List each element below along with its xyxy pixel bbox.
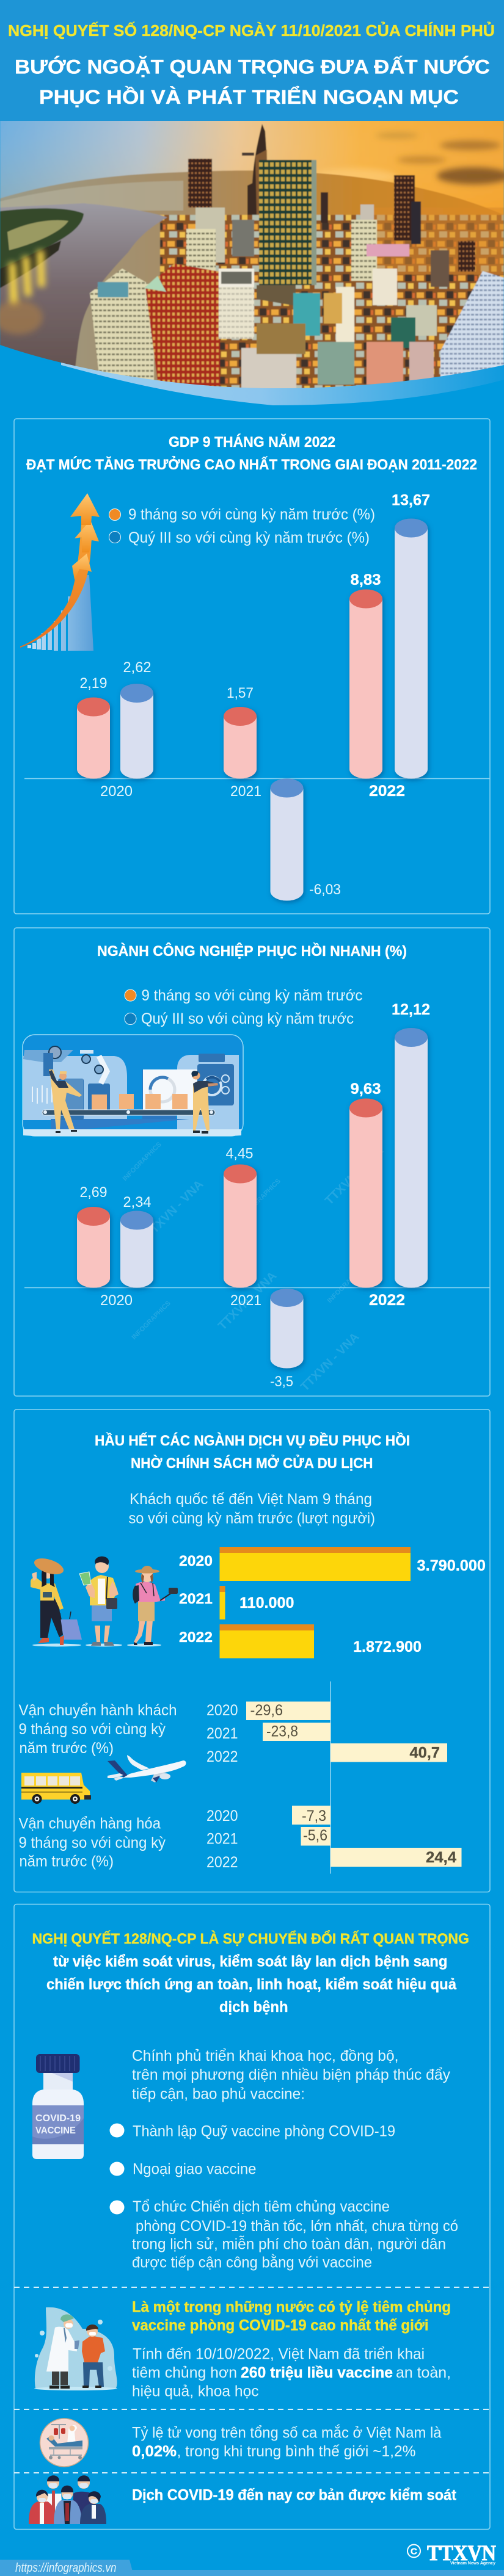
bar chart: cargo transport: -7,3: [302, 1807, 326, 1825]
bars 2022: [349, 492, 430, 800]
bullet 3: phòng COVID-19 thần tốc, lớn nhất, chưa từng có: [136, 2218, 458, 2235]
intro text: [132, 2047, 450, 2102]
watermarks: INFOGRAPHICS: [241, 1178, 282, 1219]
icon: patient in hospital bed: [40, 2419, 88, 2467]
bars 2021: 4,45: [226, 1145, 253, 1162]
legend: Quý III so với cùng kỳ năm trước: [141, 1010, 354, 1027]
legend: [125, 987, 363, 1027]
bar 2020: 2020: [179, 1553, 213, 1569]
source url: https://infographics.vn: [15, 2561, 116, 2575]
main title: [15, 56, 490, 108]
bar chart: GDP: [24, 492, 490, 900]
resolution heading: chiến lược thích ứng an toàn, linh hoạt, kiểm soát hiệu quả: [46, 1976, 457, 1993]
bar 2021: [179, 1586, 294, 1619]
main title: PHỤC HỒI VÀ PHÁT TRIỂN NGOẠN MỤC: [39, 86, 459, 108]
vaccination text: tiêm chủng hơn: [132, 2364, 237, 2381]
watermarks: [122, 1141, 386, 1394]
cargo transport label: [18, 1815, 166, 1870]
footer ribbon: [0, 2560, 504, 2576]
cargo transport label: năm trước (%): [20, 1853, 114, 1870]
logo: TTXVN: [407, 2541, 496, 2566]
panel: resolution and vaccine: [14, 1905, 490, 2530]
resolution heading: [32, 1930, 469, 2016]
bar 2021: 110.000: [239, 1594, 294, 1612]
mortality text: 0,02%: [132, 2443, 177, 2460]
bar chart: passenger transport: 2020: [206, 1702, 238, 1719]
bar chart: passenger transport: 2021: [206, 1725, 238, 1742]
bars 2021: 1,57: [227, 685, 254, 701]
bar chart: international visitors: [179, 1547, 486, 1658]
mortality text: , trong khi trung bình thế giới ~1,2%: [177, 2443, 415, 2460]
cargo transport label: 9 tháng so với cùng kỳ: [18, 1834, 166, 1851]
industry heading: NGÀNH CÔNG NGHIỆP PHỤC HỒI NHANH (%): [97, 942, 407, 960]
kicker title: NGHỊ QUYẾT SỐ 128/NQ-CP NGÀY 11/10/2021 CỦA CHÍNH PHỦ: [8, 21, 495, 40]
icon: vaccine bottle: VACCINE: [35, 2126, 76, 2136]
bullet 2: Ngoại giao vaccine: [133, 2161, 257, 2178]
GDP heading: ĐẠT MỨC TĂNG TRƯỞNG CAO NHẤT TRONG GIAI ĐOẠN 2011-2022: [26, 455, 477, 473]
bar chart: cargo transport: -5,6: [303, 1827, 327, 1844]
bar 2022: [179, 1624, 422, 1658]
bar chart: cargo transport: 2020: [206, 1807, 238, 1825]
bar chart: cargo transport: 24,4: [426, 1849, 456, 1866]
bars 2020: 2,69: [79, 1184, 108, 1201]
bullet 3: Tổ chức Chiến dịch tiêm chủng vaccine: [133, 2198, 390, 2215]
bars 2022: 2022: [369, 783, 405, 800]
passenger transport label: năm trước (%): [20, 1740, 114, 1757]
resolution heading: từ việc kiểm soát virus, kiểm soát lây lan dịch bệnh sang: [53, 1953, 447, 1970]
watermarks: INFOGRAPHICS: [131, 1300, 172, 1341]
GDP heading: [26, 433, 477, 473]
bar chart: cargo transport: [206, 1806, 462, 1871]
bar chart: cargo transport: 2022: [206, 1854, 238, 1871]
bar 2022: 2022: [179, 1629, 213, 1646]
icon: rising arrow chart: [20, 493, 100, 651]
bar 2021: 2021: [179, 1591, 213, 1607]
bars 2021: 2021: [230, 783, 261, 800]
vaccination text: Tính đến 10/10/2022, Việt Nam đã triển khai: [133, 2345, 425, 2362]
bars 2020: [77, 659, 153, 800]
services heading: [95, 1432, 410, 1472]
watermarks: INFOGRAPHICS: [326, 1263, 368, 1304]
watermarks: TTXVN - VNA: [216, 1269, 279, 1333]
watermarks: TTXVN - VNA: [142, 1178, 206, 1242]
legend: 9 tháng so với cùng kỳ năm trước (%): [128, 506, 375, 523]
legend: Quý III so với cùng kỳ năm trước (%): [128, 529, 370, 546]
vaccination text: Là một trong những nước có tỷ lệ tiêm chủng: [132, 2299, 451, 2316]
intro text: trên mọi phương diện nhiều biện pháp thúc đẩy: [132, 2066, 450, 2083]
icon: vaccine bottle: [32, 2054, 84, 2159]
bars 2022: 2022: [369, 1292, 405, 1309]
subheading: visitors: [128, 1491, 375, 1527]
passenger transport label: 9 tháng so với cùng kỳ: [18, 1721, 166, 1738]
bars 2021: -6,03: [309, 881, 341, 898]
logo: TTXVN: TTXVN: [427, 2541, 496, 2565]
bars 2021: [224, 685, 341, 900]
icon: factory illustration: [23, 1035, 243, 1136]
photo: city skyline: [0, 116, 504, 397]
bar chart: cargo transport: 2021: [206, 1830, 238, 1847]
logo: TTXVN: Vietnam News Agency: [450, 2561, 495, 2566]
icon: doctor vaccinating patient: [34, 2307, 117, 2390]
icon: masked crowd: [29, 2475, 106, 2524]
bars 2020: 2,62: [123, 659, 152, 676]
bar 2020: 3.790.000: [417, 1557, 486, 1574]
icon: vaccine bottle: COVID-19: [35, 2113, 81, 2124]
panel: services: [14, 1409, 490, 1892]
bars 2020: 2020: [100, 1292, 133, 1309]
mortality text: [132, 2423, 442, 2460]
bar chart: passenger transport: 40,7: [409, 1745, 440, 1762]
cargo transport label: Vận chuyển hàng hóa: [18, 1815, 161, 1833]
vaccination text: vaccine phòng COVID-19 cao nhất thế giới: [132, 2317, 429, 2334]
bars 2020: [77, 1184, 153, 1309]
bars 2020: 2,19: [79, 675, 108, 692]
control statement: Dịch COVID-19 đến nay cơ bản được kiểm soát: [132, 2487, 457, 2504]
services heading: NHỜ CHÍNH SÁCH MỞ CỬA DU LỊCH: [131, 1454, 373, 1472]
GDP heading: GDP 9 THÁNG NĂM 2022: [169, 433, 335, 450]
vaccination text: [132, 2299, 451, 2400]
resolution heading: dịch bệnh: [219, 1999, 288, 2016]
bars 2022: 9,63: [351, 1080, 381, 1098]
watermarks: INFOGRAPHICS: [122, 1141, 163, 1182]
main title: BƯỚC NGOẶT QUAN TRỌNG ĐƯA ĐẤT NƯỚC: [15, 56, 490, 78]
bar 2022: 1.872.900: [353, 1638, 422, 1655]
intro text: Chính phủ triển khai khoa học, đồng bộ,: [132, 2047, 398, 2064]
bars 2022: 8,83: [351, 571, 381, 588]
bars 2021: -3,5: [270, 1373, 293, 1390]
decorative crescent under photo: [61, 360, 504, 405]
bullet 3: [110, 2198, 458, 2271]
bars 2021: 2021: [230, 1292, 261, 1309]
vaccination text: an toàn,: [396, 2364, 451, 2381]
panel: GDP: [14, 419, 490, 914]
bars 2022: 13,67: [392, 492, 430, 509]
bullet 3: được tiếp cận công bằng với vaccine: [132, 2254, 372, 2271]
header band: [0, 0, 504, 121]
bars 2021: [224, 1145, 303, 1390]
bar chart: passenger transport: [206, 1702, 447, 1765]
bar 2020: [179, 1547, 486, 1581]
icon: bus: [21, 1773, 91, 1804]
bullet 3: trong lịch sử, miễn phí cho toàn dân, người dân: [132, 2235, 446, 2252]
axis line: transport: [330, 1681, 331, 1874]
bar chart: passenger transport: -29,6: [250, 1702, 283, 1719]
services heading: HẦU HẾT CÁC NGÀNH DỊCH VỤ ĐỀU PHỤC HỒI: [95, 1432, 410, 1449]
panel: industry: [14, 928, 490, 1396]
vaccination text: hiệu quả, khoa học: [132, 2383, 259, 2400]
legend: [109, 506, 375, 546]
bar chart: industry: [24, 1001, 490, 1390]
bars 2022: 12,12: [392, 1001, 430, 1018]
bar chart: passenger transport: -23,8: [266, 1723, 298, 1740]
icon: tourists: [31, 1555, 178, 1647]
bullet 1: Thành lập Quỹ vaccine phòng COVID-19: [133, 2123, 395, 2140]
bar chart: passenger transport: 2022: [206, 1748, 238, 1765]
passenger transport label: Vận chuyển hành khách: [18, 1702, 177, 1719]
passenger transport label: [18, 1702, 177, 1757]
watermarks: TTXVN - VNA: [298, 1330, 362, 1394]
bars 2020: 2,34: [123, 1194, 152, 1210]
watermarks: TTXVN - VNA: [323, 1144, 386, 1208]
vaccination text: 260 triệu liều vaccine: [241, 2364, 393, 2381]
intro text: tiếp cận, bao phủ vaccine:: [132, 2085, 305, 2102]
mortality text: Tỷ lệ tử vong trên tổng số ca mắc ở Việt Nam là: [132, 2423, 442, 2442]
legend: 9 tháng so với cùng kỳ năm trước: [142, 987, 363, 1004]
subheading: visitors: so với cùng kỳ năm trước (lượt người): [128, 1510, 375, 1527]
logo: TTXVN: C: [411, 2547, 417, 2556]
bars 2020: 2020: [100, 783, 133, 800]
icon: airplane: [108, 1755, 186, 1782]
subheading: visitors: Khách quốc tế đến Việt Nam 9 tháng: [130, 1491, 372, 1508]
bars 2022: [349, 1001, 430, 1309]
resolution heading: NGHỊ QUYẾT 128/NQ-CP LÀ SỰ CHUYỂN ĐỔI RẤT QUAN TRỌNG: [32, 1930, 469, 1947]
